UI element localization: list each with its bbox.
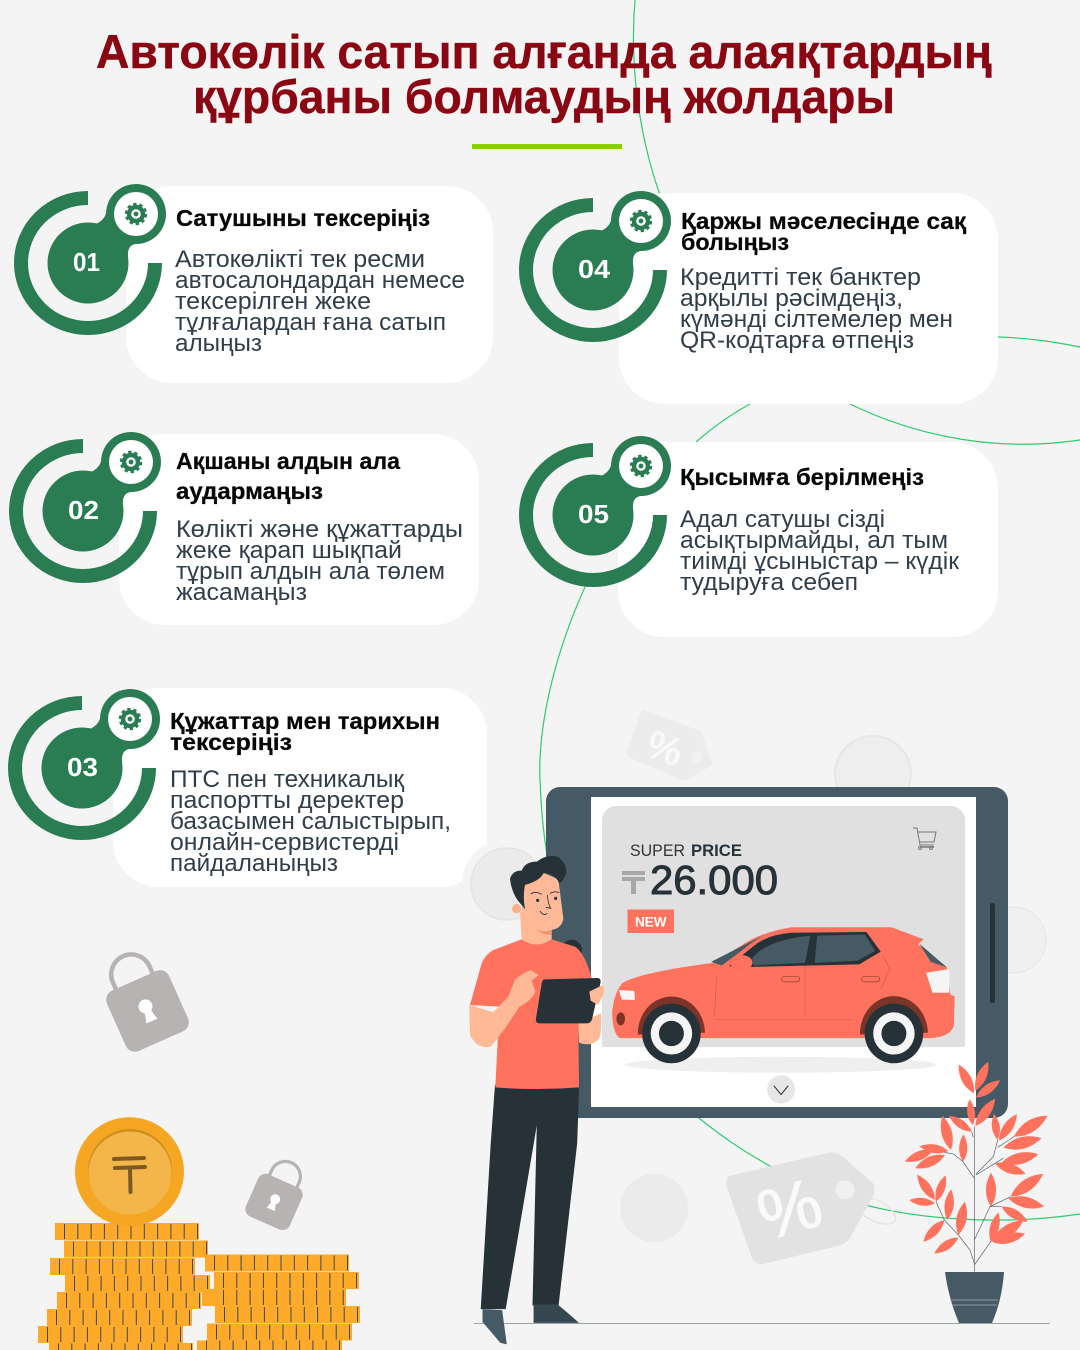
ear (512, 904, 521, 913)
body 01: автосалондардан немесе (175, 267, 465, 294)
handheld tablet (536, 978, 601, 1023)
body 03: паспортты деректер (170, 787, 404, 814)
badge 05 (526, 436, 671, 580)
tenge sign (622, 871, 645, 894)
backpack strap (561, 940, 582, 960)
background decor: price tag top: % (640, 722, 689, 776)
upper body (469, 856, 604, 1089)
background decor: circle behind person (462, 839, 552, 929)
ground line (474, 1323, 1050, 1324)
neck (520, 912, 552, 944)
price tag bottom: % (749, 1163, 830, 1255)
left arm (469, 970, 539, 1047)
illustration in shared coordinates (612, 927, 955, 1104)
body 01 (175, 246, 465, 357)
pot (945, 1272, 1004, 1323)
leaves (903, 1060, 1051, 1257)
facial features (531, 892, 559, 915)
body 04: QR-кодтарға өтпеңіз (680, 327, 914, 354)
heading 02: аудармаңыз (176, 478, 323, 504)
price label (630, 841, 742, 860)
badge 03: 03 (67, 754, 98, 782)
cart icon (913, 828, 936, 850)
price label: SUPER (630, 841, 685, 860)
price value: 26.000 (650, 857, 778, 903)
body 02: жеке қарап шықпай (176, 537, 402, 564)
body 05: Адал сатушы сізді (680, 506, 885, 533)
shoes (482, 1304, 579, 1344)
large padlock (92, 942, 192, 1055)
heading 05: Қысымға берілмеңіз (680, 464, 924, 490)
heading 02: Ақшаны алдын ала (176, 448, 401, 474)
badge 02: 02 (68, 497, 99, 525)
tenge coin (75, 1117, 184, 1226)
wheels (642, 1004, 923, 1063)
face (522, 873, 563, 930)
heading 03: Құжаттар мен тарихын (170, 708, 440, 734)
body 01: Автокөлікті тек ресми (175, 246, 425, 273)
body 05: тиімді ұсыныстар – күдік (680, 548, 960, 575)
lower body (481, 1085, 579, 1344)
card 05 (526, 436, 998, 637)
coin stack left (38, 1223, 210, 1350)
title: Автокөлік сатып алғанда алаяқтардың (96, 25, 992, 78)
price label: PRICE (691, 841, 742, 860)
body 05: асықтырмайды, ал тым (680, 527, 948, 554)
shirt (470, 939, 592, 1089)
side button (990, 903, 995, 1003)
body 05: тудыруға себеп (680, 569, 858, 596)
body 01: алыңыз (175, 330, 262, 357)
badge 05: 05 (578, 501, 609, 529)
card 03 (15, 688, 487, 887)
background decor: circle top (835, 736, 911, 812)
car (612, 927, 955, 1038)
body 04: арқылы рәсімдеңіз, (680, 285, 903, 312)
body 03 (170, 766, 451, 877)
badge 04: 04 (578, 256, 611, 284)
body 03: онлайн-сервистерді (170, 829, 399, 856)
title: құрбаны болмаудың жолдары (193, 70, 895, 123)
new tag: NEW (635, 914, 667, 930)
plant (903, 1060, 1051, 1323)
stems (933, 1127, 1023, 1272)
body 02: Көлікті және құжаттарды (176, 516, 463, 543)
body 05 (680, 506, 960, 596)
background decor: price tag top (629, 712, 710, 779)
heading 04: болыңыз (681, 229, 789, 255)
badge 02 (16, 432, 161, 576)
body 01: тексерілген жеке (175, 288, 371, 315)
heading 03: тексеріңіз (170, 729, 292, 755)
tablet screen illustration (546, 787, 1008, 1118)
hair (510, 856, 566, 909)
new tag (628, 910, 674, 933)
body 03: базасымен салыстырып, (170, 808, 451, 835)
scroll chevron (767, 1075, 795, 1104)
body 01: тұлғалардан ғана сатып (175, 309, 446, 336)
badge 01: 01 (73, 249, 100, 277)
badge 01 (21, 184, 166, 328)
badge 03 (15, 689, 160, 833)
heading 04 (681, 208, 966, 255)
heading 02 (176, 448, 401, 504)
price tag bottom (726, 1152, 895, 1264)
title (96, 25, 992, 123)
background decor: circle right (980, 907, 1046, 973)
body 03: пайдаланыңыз (170, 850, 338, 877)
thin green decorative arcs (540, 0, 1080, 1220)
tablet frame (546, 787, 1008, 1118)
card 02 (16, 432, 479, 625)
card 01 (21, 184, 493, 383)
chin shadow (536, 929, 552, 935)
body 04 (680, 264, 953, 354)
heading 03 (170, 708, 440, 755)
person (469, 856, 604, 1344)
heading 04: Қаржы мәселесінде сақ (681, 208, 966, 234)
heading 01: Сатушыны тексеріңіз (176, 205, 430, 231)
badge 04 (526, 191, 671, 335)
body 02 (176, 516, 463, 606)
small padlock (243, 1153, 313, 1233)
body 04: күмәнді сілтемелер мен (680, 306, 953, 333)
right hand (589, 985, 604, 1005)
body 04: Кредитті тек банктер (680, 264, 921, 291)
background decor: circle bottom (620, 1174, 688, 1242)
coin stack right (197, 1254, 360, 1350)
product panel (602, 806, 965, 1047)
card 04 (526, 191, 998, 404)
screen (591, 797, 976, 1107)
legs (481, 1085, 579, 1309)
car shadow (625, 1057, 937, 1073)
body 03: ПТС пен техникалық (170, 766, 404, 793)
title underline (472, 144, 622, 149)
right forearm (578, 1013, 601, 1044)
body 02: жасамаңыз (176, 579, 307, 606)
body 02: тұрып алдын ала төлем (176, 558, 445, 585)
